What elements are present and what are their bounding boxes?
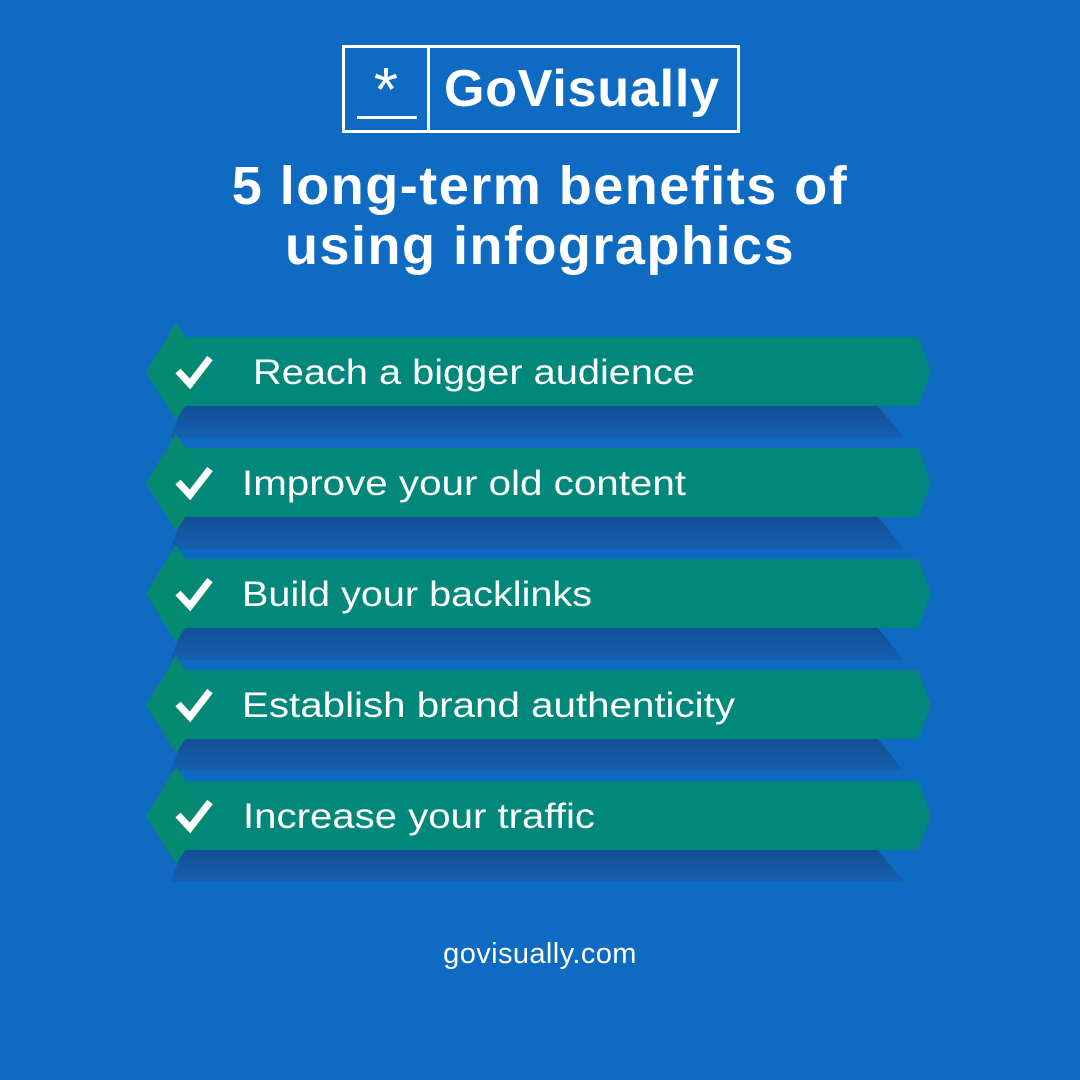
footer url: govisually.com xyxy=(443,938,637,970)
item 2: Improve your old content xyxy=(242,464,686,503)
item 1: Reach a bigger audience xyxy=(253,353,695,392)
item 4 xyxy=(146,656,931,771)
item 4: Establish brand authenticity xyxy=(242,686,736,725)
title: 5 long-term benefits of xyxy=(232,156,848,216)
item 3 xyxy=(146,545,931,660)
logo icon: * xyxy=(374,56,398,125)
logo xyxy=(342,45,740,133)
title xyxy=(232,156,848,276)
item 5: Increase your traffic xyxy=(243,797,595,836)
item 5 xyxy=(146,767,931,882)
item 1 xyxy=(146,323,931,438)
title: using infographics xyxy=(285,216,795,276)
item 3: Build your backlinks xyxy=(242,575,592,614)
item 2 xyxy=(146,434,931,549)
logo icon xyxy=(345,48,430,130)
logo wordmark: GoVisually xyxy=(444,60,720,118)
